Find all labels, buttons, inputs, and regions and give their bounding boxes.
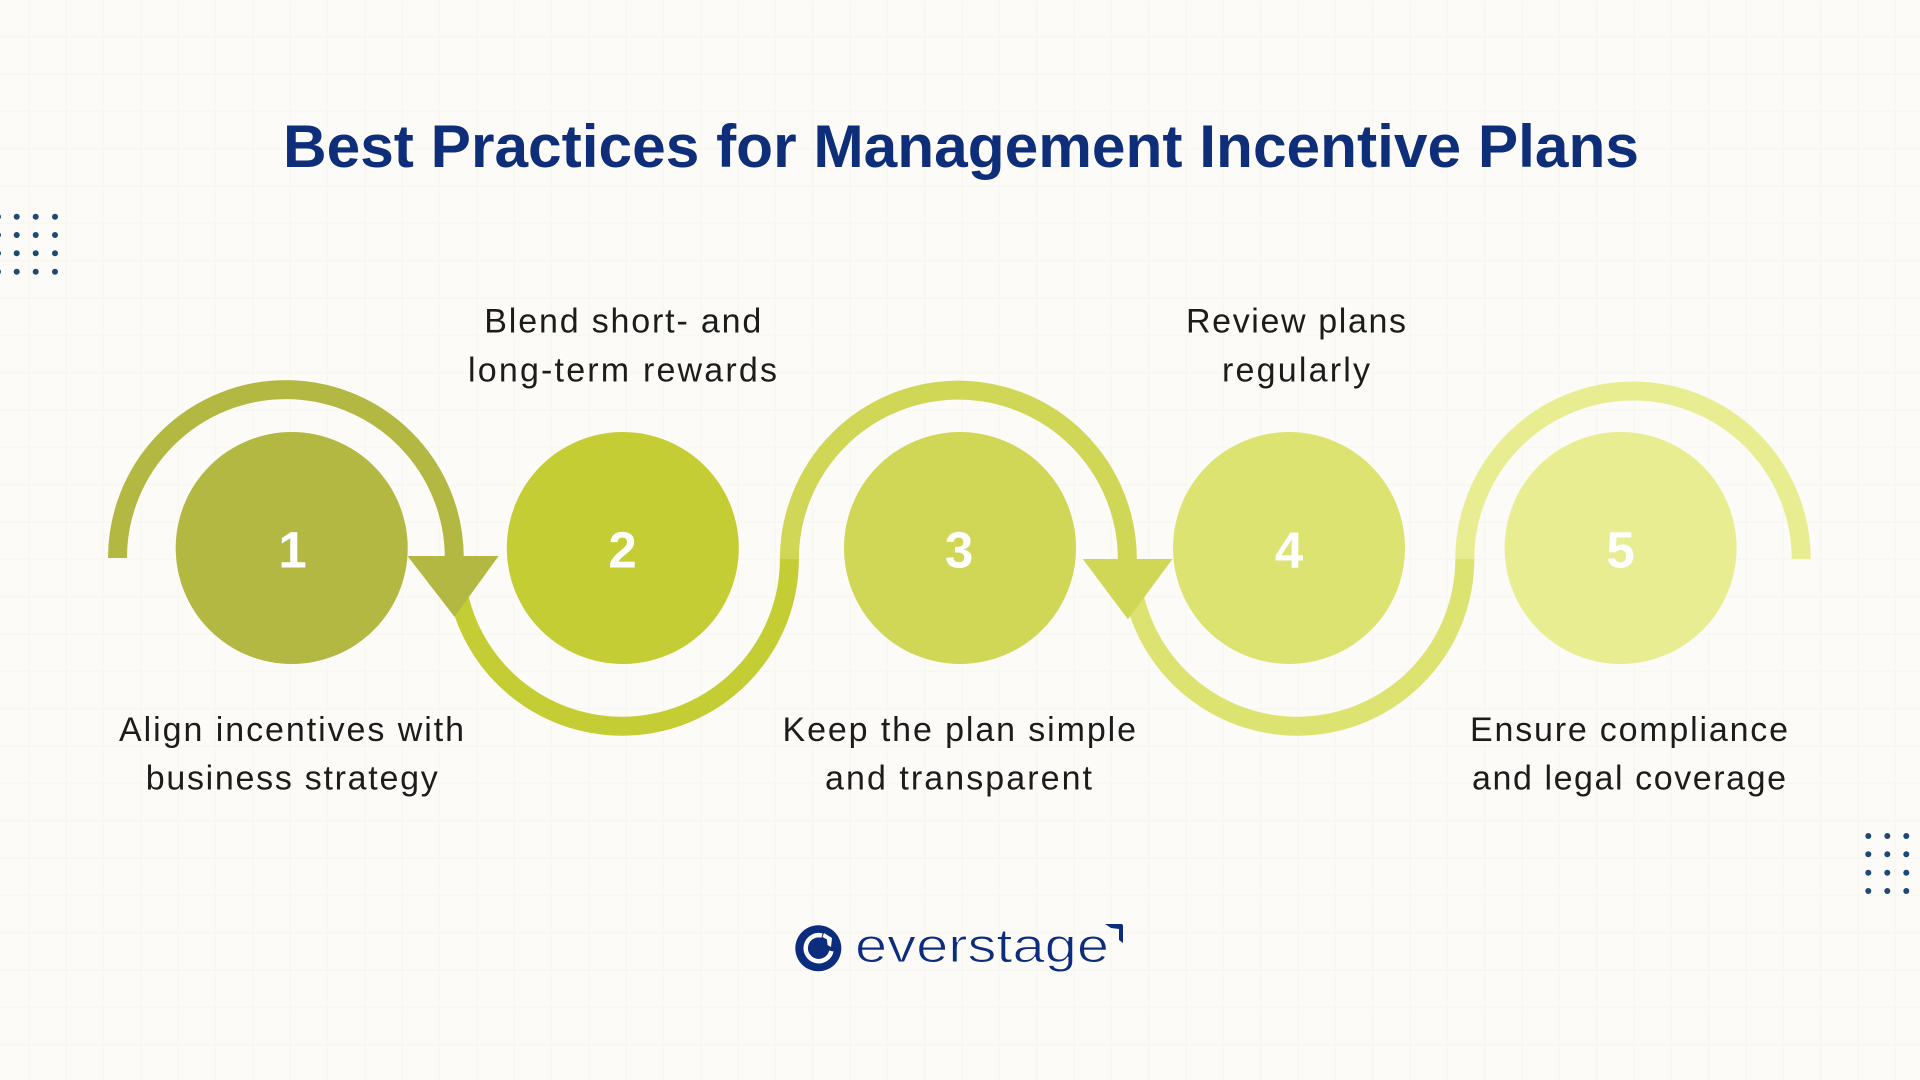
step 3 upper arc	[789, 390, 1127, 559]
step 5 upper arc	[1465, 391, 1801, 559]
step 2 label: Blend short- and	[484, 302, 761, 340]
step 1 label: business strategy	[146, 760, 438, 798]
step 3 label: Keep the plan simple	[782, 711, 1136, 749]
step 3 label: and transparent	[825, 760, 1093, 798]
step 5 label: Ensure compliance	[1470, 711, 1788, 749]
logo: everstage: everstage	[855, 920, 1109, 973]
step 1 label: Align incentives with	[119, 711, 464, 749]
step 4 label: regularly	[1222, 352, 1370, 390]
step 5 label	[1470, 711, 1788, 798]
arrowhead: step 3 to step 4	[1083, 559, 1172, 619]
step 2 badge: 2	[608, 522, 637, 578]
step 2 label: long-term rewards	[468, 352, 777, 390]
step 2 label	[468, 302, 777, 390]
step 4 label: Review plans	[1186, 302, 1406, 340]
step 5 badge	[1505, 432, 1737, 664]
step 3 badge: 3	[945, 522, 973, 578]
step 2 lower arc	[458, 559, 789, 726]
step 4 label	[1186, 302, 1406, 390]
step 1 badge: 1	[278, 522, 307, 578]
decorative dot grid: bottom right	[1865, 833, 1909, 894]
step 5 label: and legal coverage	[1472, 760, 1786, 798]
step 4 badge: 4	[1275, 522, 1304, 578]
step 1 upper arc	[118, 390, 454, 558]
step 1 badge	[176, 432, 408, 664]
logo: everstage	[795, 920, 1123, 973]
step 2 badge	[507, 432, 739, 664]
step 4 badge	[1173, 432, 1405, 664]
step 1 label	[119, 711, 464, 798]
title: Best Practices for Management Incentive Plans	[283, 113, 1639, 180]
step 5 badge: 5	[1606, 522, 1635, 578]
decorative dot grid: top left	[0, 214, 58, 275]
step 3 label	[782, 711, 1136, 798]
step 4 lower arc	[1134, 559, 1465, 726]
arrowhead: step 1 to step 2	[408, 556, 499, 617]
step 3 badge	[844, 432, 1076, 664]
